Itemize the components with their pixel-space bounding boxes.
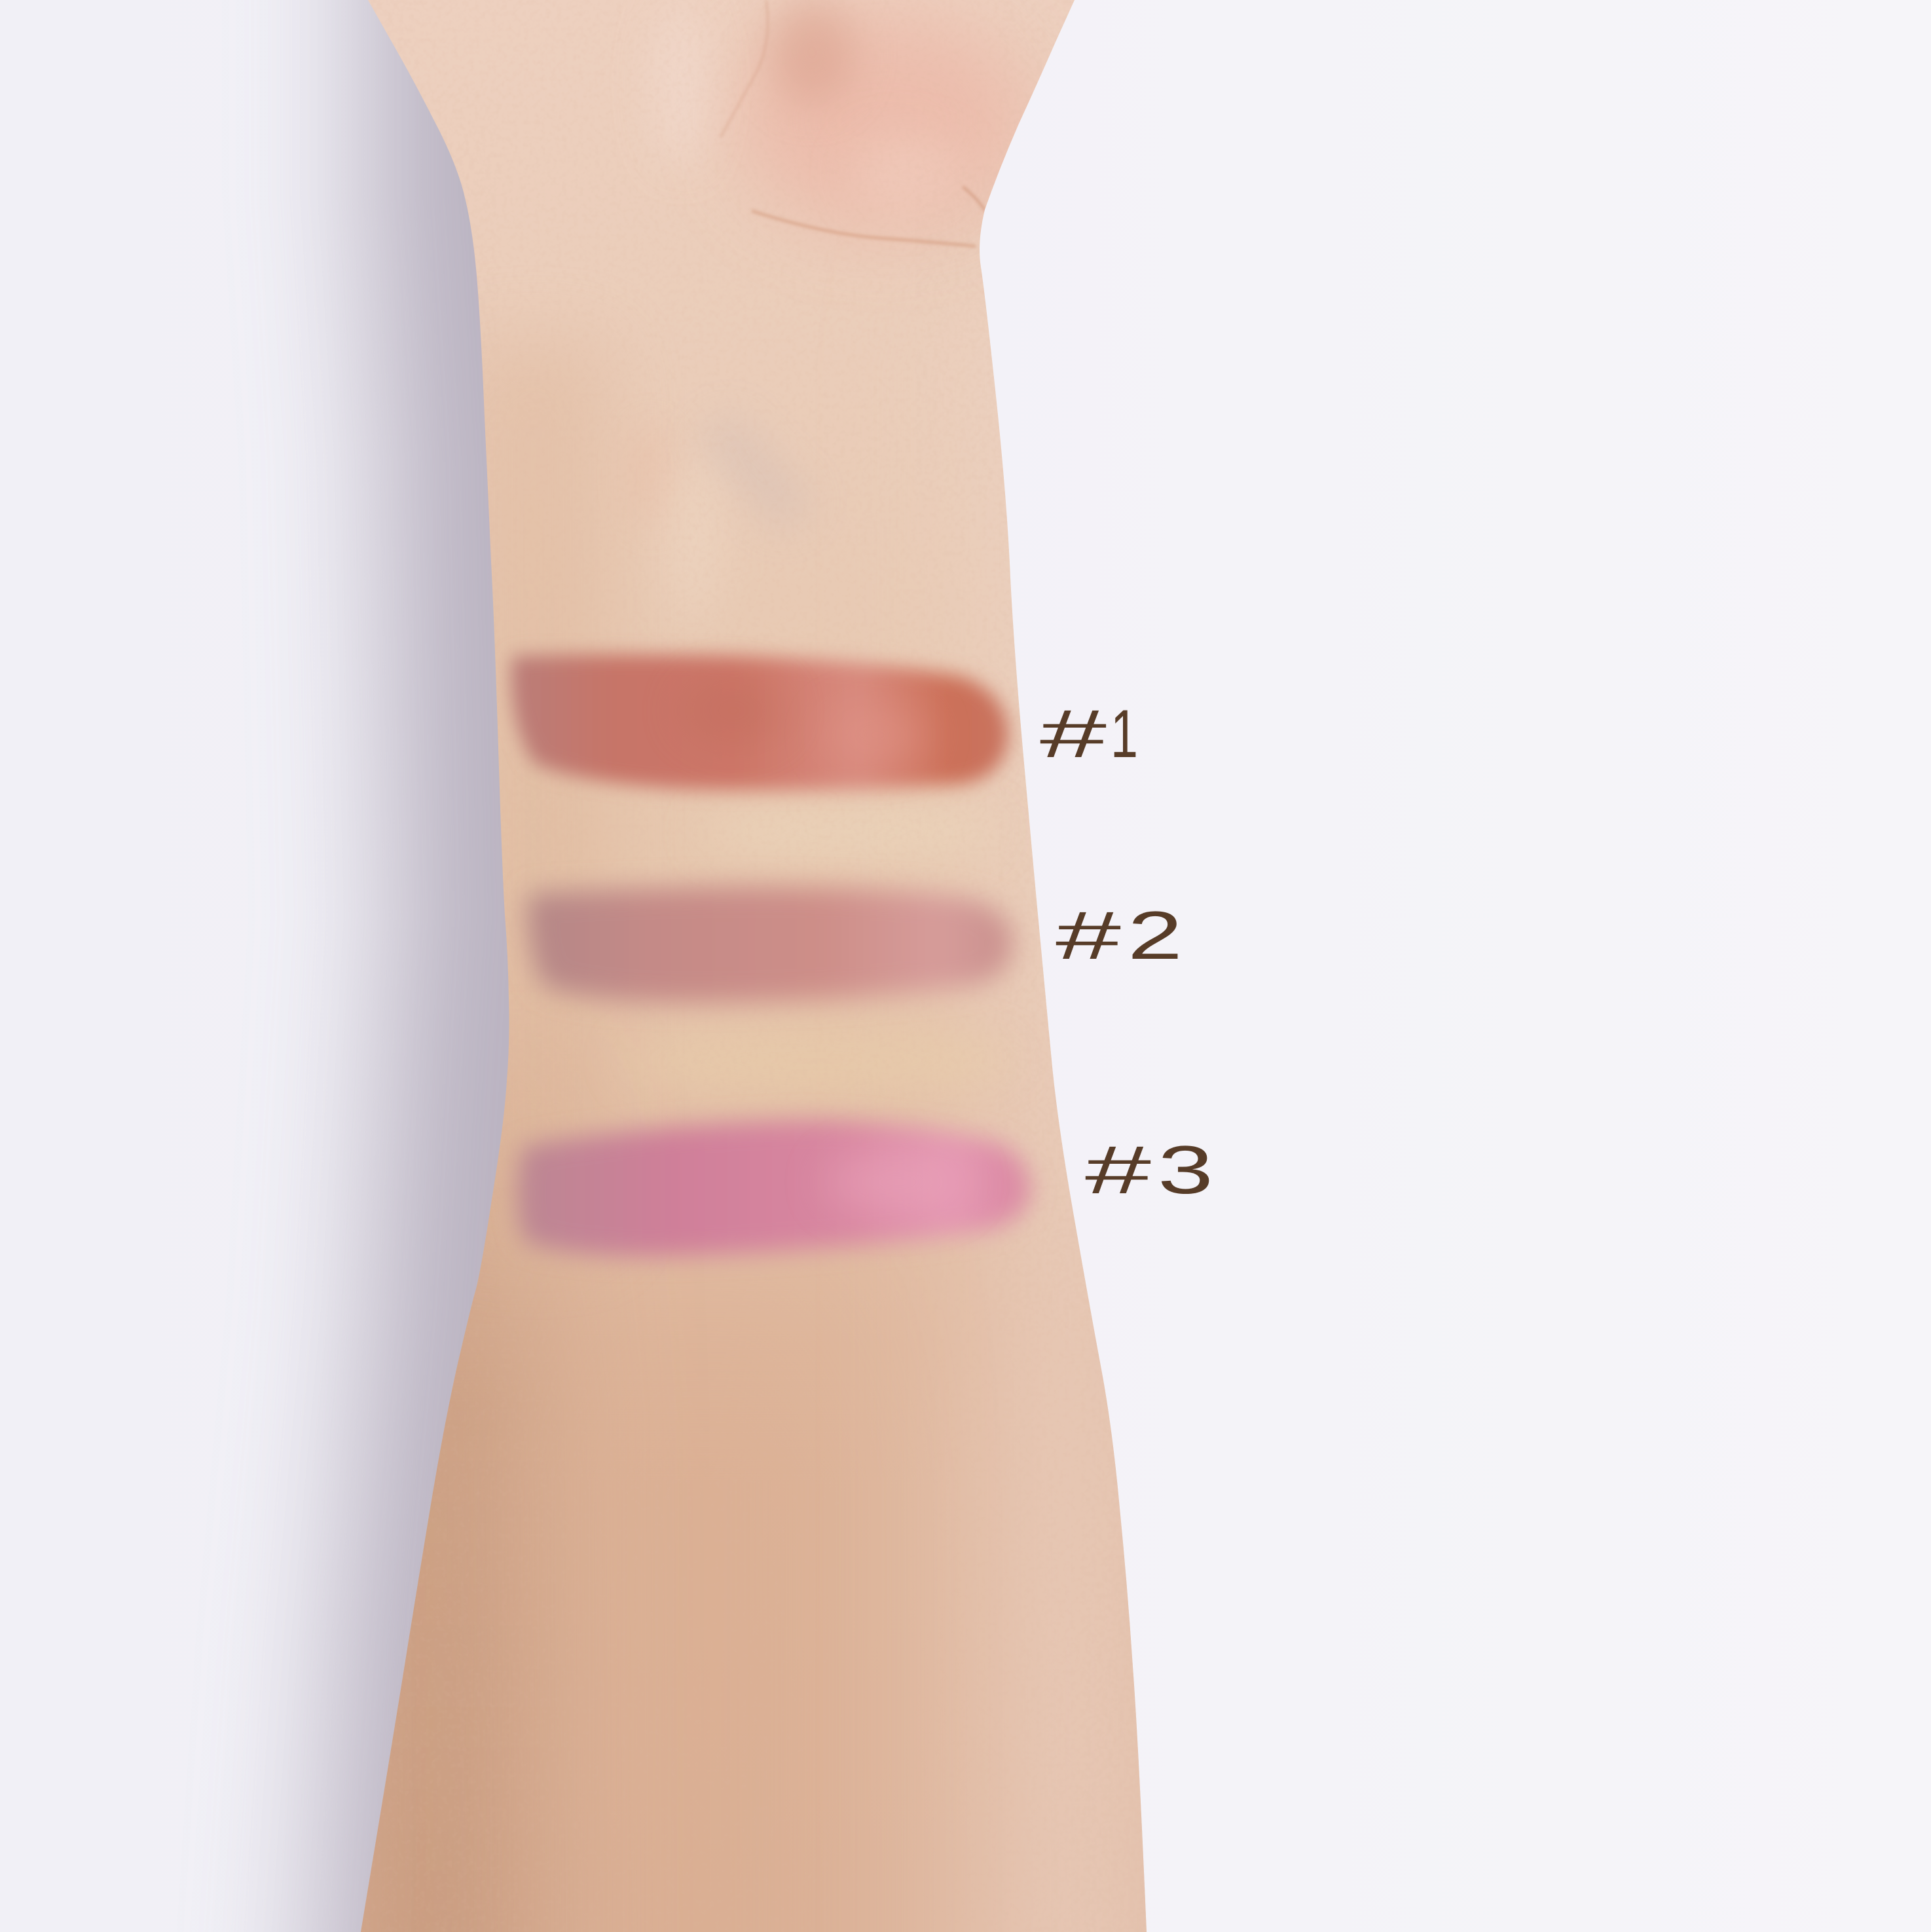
- label: #3: #: [1085, 1132, 1151, 1208]
- forearm centre warmth: [576, 1179, 838, 1932]
- swatch 2: [528, 887, 1013, 1002]
- tendon highlight: [655, 3, 707, 167]
- label: #3: [1085, 1132, 1213, 1208]
- upper left freckled side: [458, 341, 609, 1244]
- pale area by tendon: [665, 452, 724, 622]
- label: #2: 2: [1128, 898, 1183, 974]
- skin between swatches: [701, 802, 1002, 861]
- forearm pale right side: [982, 196, 1179, 1932]
- arm cast shadow: [321, 0, 720, 1932]
- palm fold line: [720, 0, 767, 138]
- warm stripe by tendon: [635, 422, 668, 527]
- arm: [327, 0, 1179, 1932]
- label: #1: #: [1040, 696, 1107, 772]
- palm base pink area: [737, 13, 1031, 229]
- inner wrist veins: [714, 426, 799, 517]
- label: #2: [1056, 898, 1183, 974]
- dark palm fold: [769, 0, 855, 105]
- thenar highlight: [851, 134, 963, 213]
- label: #1: 1: [1111, 696, 1138, 772]
- skin pores: [327, 0, 1179, 1932]
- edge crease: [963, 187, 985, 211]
- swatch 1: [511, 654, 1008, 790]
- photo: arm with lipstick swatches: [234, 0, 1209, 1932]
- wrist crease: [752, 211, 976, 246]
- left edge shading: [327, 982, 543, 1932]
- swatch 3: [517, 1120, 1030, 1256]
- swatch 1 sheen: [825, 709, 930, 761]
- label: #3: 3: [1158, 1132, 1213, 1208]
- label: #2: #: [1056, 898, 1121, 974]
- label: #1: [1040, 696, 1138, 772]
- skin base: [327, 0, 1179, 1932]
- swatch 3 sheen: [825, 1153, 969, 1212]
- swatch 1 dark band: [681, 678, 786, 743]
